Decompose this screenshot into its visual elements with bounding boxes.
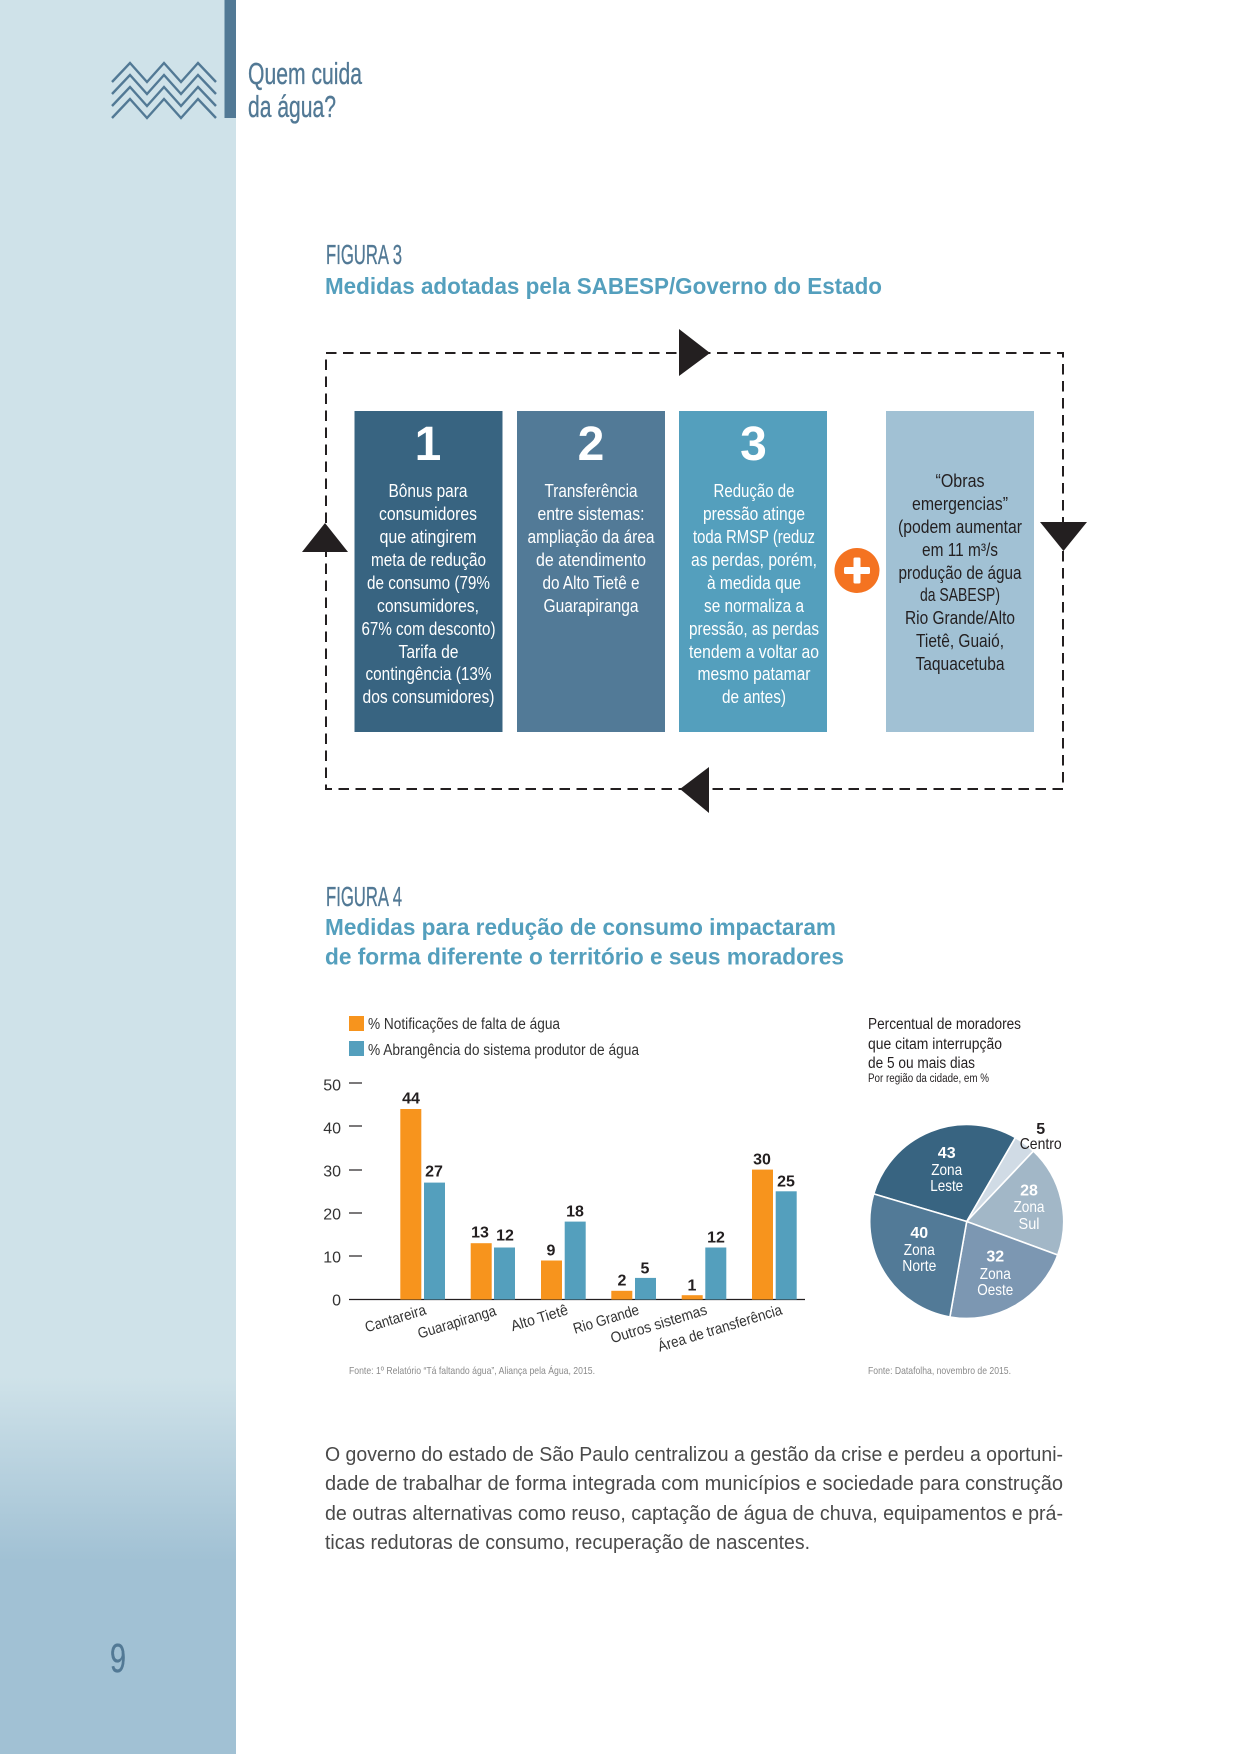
panel: emergency works: emergencias” xyxy=(912,494,1008,514)
panel: emergency works: Rio Grande/Alto xyxy=(905,608,1015,628)
pie chart title: Percentual de moradores xyxy=(868,1016,1021,1033)
legend: % Abrangência do sistema produtor de água xyxy=(368,1042,639,1059)
panel: emergency works xyxy=(886,411,1034,732)
panel: measure 1: meta de redução xyxy=(371,550,486,570)
pie chart xyxy=(870,1121,1064,1318)
category labels: Cantareira xyxy=(363,1301,429,1336)
panel: measure 1: consumidores, xyxy=(377,596,479,616)
body paragraph: O governo do estado de São Paulo centralizou a gestão da crise e perdeu a oportuni- xyxy=(325,1444,1063,1466)
slice: Zona Sul: Zona xyxy=(1014,1199,1045,1216)
panel: measure 3: tendem a voltar ao xyxy=(689,642,819,662)
slice: Zona Norte: 40 xyxy=(910,1225,928,1242)
panel: measure 3: se normaliza a xyxy=(704,596,805,616)
orange bars xyxy=(400,1109,773,1300)
panel: measure 3: toda RMSP (reduz xyxy=(693,527,815,547)
arrow: right down xyxy=(1040,522,1087,551)
panel: measure 1: que atingirem xyxy=(380,527,476,547)
panel: measure 2: do Alto Tietê e xyxy=(542,573,640,593)
slice: Zona Norte: Zona xyxy=(904,1242,935,1259)
slice: Zona Oeste: Oeste xyxy=(977,1282,1013,1299)
slice: Zona Leste: Zona xyxy=(931,1162,962,1179)
dashed cycle frame xyxy=(326,353,1063,789)
bar values: 12 xyxy=(707,1230,725,1246)
pie chart title: de 5 ou mais dias xyxy=(868,1055,975,1072)
bar chart xyxy=(323,1078,805,1356)
category labels: Alto Tietê xyxy=(509,1302,570,1335)
y axis labels xyxy=(323,1078,341,1310)
heading: figura 3: FIGURA 3 xyxy=(326,239,402,270)
panel: measure 3: mesmo patamar xyxy=(698,664,811,684)
panel: measure 1 xyxy=(354,411,502,732)
panel: measure 1: de consumo (79% xyxy=(367,573,490,593)
y axis labels: 10 xyxy=(323,1250,341,1266)
panel: emergency works: Tietê, Guaió, xyxy=(916,631,1004,651)
source: pie chart: Fonte: Datafolha, novembro de 2015. xyxy=(868,1365,1011,1377)
panel: measure 2: de atendimento xyxy=(536,550,646,570)
panel: emergency works: “Obras xyxy=(936,471,984,491)
bar values xyxy=(402,1090,795,1294)
bar values: 1 xyxy=(688,1278,697,1294)
panel: emergency works: (podem aumentar xyxy=(898,517,1022,537)
category labels: Outros sistemas xyxy=(609,1302,709,1347)
header tab bar xyxy=(224,0,236,118)
bar values: 44 xyxy=(402,1090,420,1108)
panel: measure 3: de antes) xyxy=(722,687,786,707)
arrow: left up xyxy=(302,523,348,552)
category labels: Rio Grande xyxy=(571,1302,641,1338)
arrow: bottom left xyxy=(680,767,709,813)
panel: measure 2: entre sistemas: xyxy=(538,504,644,524)
bar values: 13 xyxy=(471,1224,489,1242)
category labels: Guarapiranga xyxy=(416,1302,499,1343)
panel: measure 2 xyxy=(517,411,665,732)
panel: measure 1: 67% com desconto) xyxy=(362,619,496,639)
slice: Centro: 5 xyxy=(1036,1121,1045,1138)
panel: measure 3: à medida que xyxy=(707,573,801,593)
slice: Zona Sul: Sul xyxy=(1018,1216,1040,1233)
slice: Zona Leste: Leste xyxy=(930,1178,963,1195)
arrow: top right xyxy=(679,329,710,376)
body paragraph: dade de trabalhar de forma integrada com municípios e sociedade para construção xyxy=(325,1473,1063,1495)
panel: measure 2: Transferência xyxy=(544,481,638,501)
heading: figura 4 xyxy=(325,881,844,970)
panel: emergency works: da SABESP) xyxy=(920,585,1000,605)
panel: measure 3: as perdas, porém, xyxy=(691,550,817,570)
heading: figura 4: Medidas para redução de consumo impactaram xyxy=(325,914,836,940)
pie chart title: que citam interrupção xyxy=(868,1036,1002,1053)
heading: figura 3: Medidas adotadas pela SABESP/Governo do Estado xyxy=(325,273,882,299)
slice: Centro xyxy=(1020,1121,1062,1153)
panel: measure 1: contingência (13% xyxy=(366,664,492,684)
slice: Zona Norte: Norte xyxy=(902,1258,936,1275)
publication title: Quem cuida xyxy=(248,56,363,91)
panel: emergency works: Taquacetuba xyxy=(916,654,1005,674)
page number: 9 xyxy=(110,1635,126,1681)
panel: measure 3: pressão atinge xyxy=(703,504,805,524)
icon: plus xyxy=(834,548,880,593)
icon: water waves xyxy=(112,63,216,118)
blue bars xyxy=(424,1183,797,1300)
slice: Zona Norte xyxy=(902,1225,936,1275)
source: bar chart: Fonte: 1º Relatório “Tá faltando água”, Aliança pela Água, 2015. xyxy=(349,1364,595,1377)
slice: Zona Sul: 28 xyxy=(1020,1182,1038,1200)
panel: measure 1: Bônus para xyxy=(388,481,468,501)
legend: % Notificações de falta de água xyxy=(368,1016,560,1033)
pie chart title: Por região da cidade, em % xyxy=(868,1073,989,1085)
slice: Zona Oeste xyxy=(977,1248,1013,1299)
y axis labels: 20 xyxy=(323,1206,341,1224)
panel: measure 1: Tarifa de xyxy=(398,642,458,662)
panel: measure 2: ampliação da área xyxy=(528,527,655,547)
bar values: 18 xyxy=(566,1204,584,1220)
slice: Zona Leste xyxy=(930,1145,963,1195)
body paragraph: de outras alternativas como reuso, captação de água de chuva, equipamentos e prá- xyxy=(325,1503,1063,1525)
slice: Zona Oeste: Zona xyxy=(980,1266,1011,1283)
category labels xyxy=(363,1301,785,1356)
publication title xyxy=(248,56,363,124)
panel: measure 1: 1 xyxy=(415,418,441,471)
bar values: 12 xyxy=(496,1228,514,1244)
category labels: Área de transferência xyxy=(656,1301,785,1356)
panel: emergency works: produção de água xyxy=(898,563,1022,583)
panel: measure 1: consumidores xyxy=(379,504,477,524)
panel: measure 2: 2 xyxy=(578,418,604,471)
y axis labels: 0 xyxy=(332,1292,341,1310)
panel: measure 3: 3 xyxy=(740,418,767,471)
panel: measure 3: Redução de xyxy=(714,481,794,501)
bar values: 9 xyxy=(547,1242,556,1260)
heading: figura 4: de forma diferente o território e seus moradores xyxy=(325,944,844,970)
legend xyxy=(349,1016,639,1059)
panel: measure 3 xyxy=(679,411,827,732)
panel: measure 1: dos consumidores) xyxy=(362,687,494,707)
bar values: 5 xyxy=(641,1260,650,1278)
panel: emergency works: em 11 m³/s xyxy=(922,540,998,560)
slice: Zona Sul xyxy=(1014,1182,1045,1233)
publication title: da água? xyxy=(248,89,336,124)
bar values: 25 xyxy=(777,1174,795,1190)
heading: figura 4: FIGURA 4 xyxy=(326,881,402,912)
pie chart title xyxy=(868,1016,1021,1085)
panel: measure 2: Guarapiranga xyxy=(544,596,639,616)
y axis labels: 40 xyxy=(323,1120,341,1138)
slice: Zona Leste: 43 xyxy=(938,1145,956,1162)
body paragraph xyxy=(325,1444,1063,1554)
slice: Centro: Centro xyxy=(1020,1136,1062,1153)
bar values: 30 xyxy=(753,1152,771,1168)
heading: figura 3 xyxy=(325,239,882,299)
slice: Zona Oeste: 32 xyxy=(986,1248,1004,1266)
sidebar xyxy=(0,0,236,1754)
panel: measure 3: pressão, as perdas xyxy=(689,619,819,639)
bar values: 27 xyxy=(425,1164,443,1180)
bar values: 2 xyxy=(618,1272,627,1290)
body paragraph: ticas redutoras de consumo, recuperação de nascentes. xyxy=(325,1532,810,1554)
y axis labels: 30 xyxy=(323,1164,341,1180)
y axis labels: 50 xyxy=(323,1078,341,1094)
